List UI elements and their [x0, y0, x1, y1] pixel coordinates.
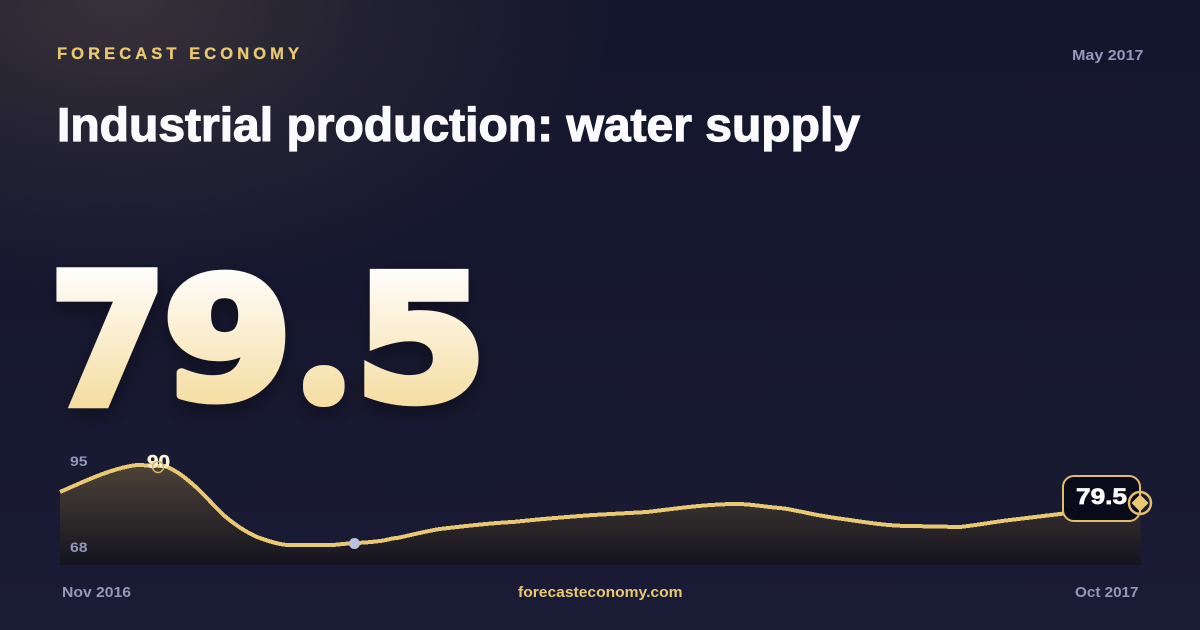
big value: 7	[50, 237, 166, 447]
big value: 5	[355, 239, 487, 440]
value callout: 79.5	[1076, 484, 1127, 509]
low marker	[349, 538, 360, 549]
axis label: min: 68	[70, 539, 88, 555]
date: May 2017	[1072, 47, 1144, 64]
end date: Oct 2017	[1075, 584, 1138, 601]
start date: Nov 2016	[62, 584, 131, 601]
peak marker	[152, 462, 164, 472]
end marker	[1129, 492, 1151, 514]
axis label: max: 95	[70, 453, 88, 469]
big value	[50, 237, 487, 447]
area fill	[60, 465, 1141, 565]
sparkline chart	[60, 452, 1151, 565]
value callout	[1063, 476, 1140, 521]
brand label: FORECAST ECONOMY	[57, 45, 299, 63]
trend line	[60, 465, 1075, 545]
big value: 9	[163, 243, 292, 437]
big value: .	[320, 369, 328, 393]
title: Industrial production: water supply	[57, 98, 860, 151]
website: forecasteconomy.com	[518, 584, 682, 601]
peak label: 90	[147, 452, 170, 472]
